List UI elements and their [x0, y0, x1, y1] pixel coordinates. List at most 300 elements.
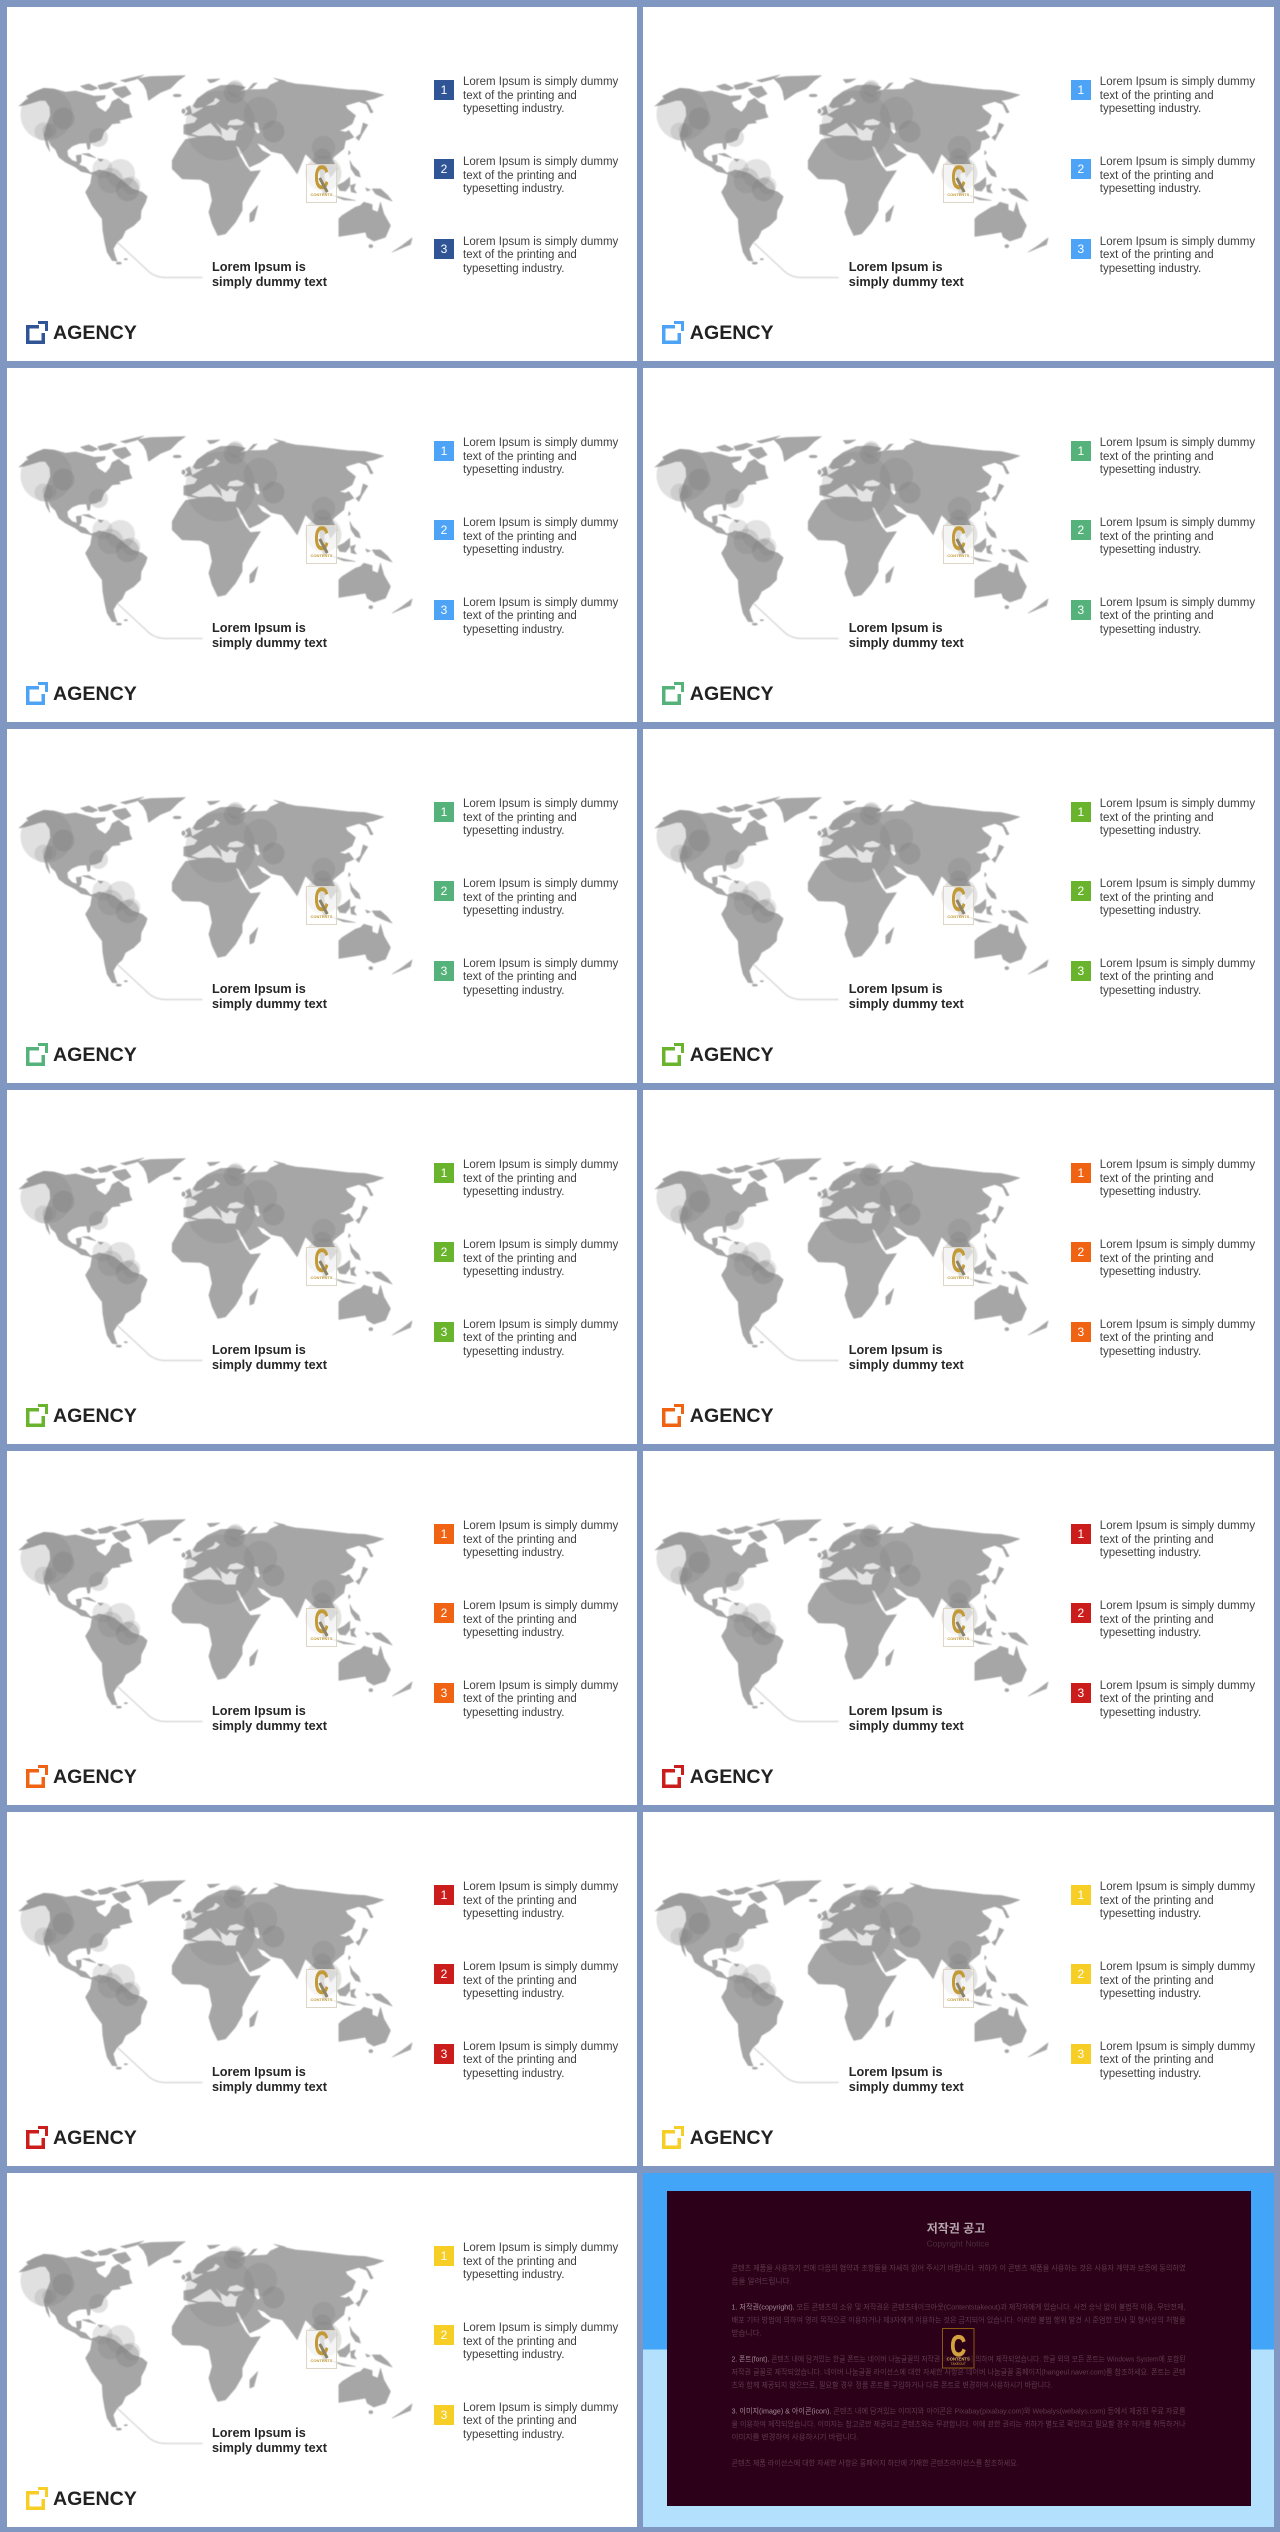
list item 1: typesetting industry. — [463, 1908, 564, 1920]
panel: slide 7 lime — [6, 1090, 637, 1444]
list item 2: Lorem Ipsum is simply dummy — [463, 1600, 618, 1612]
watermark logo — [306, 1608, 337, 1647]
list item 1: typesetting industry. — [463, 1547, 564, 1559]
list item 1 — [434, 437, 618, 476]
watermark logo: CONTENTS — [310, 2358, 332, 2363]
list item 3: 3 — [441, 242, 447, 256]
watermark logo — [943, 164, 974, 203]
list item 3: typesetting industry. — [1100, 624, 1201, 636]
list item 1: text of the printing and — [1100, 90, 1214, 102]
list item 2: Lorem Ipsum is simply dummy — [1100, 156, 1255, 168]
list item 3 — [434, 596, 618, 636]
list item 1: 1 — [441, 1888, 447, 1902]
list item 2: Lorem Ipsum is simply dummy — [463, 2322, 618, 2334]
list item 2: 2 — [441, 1606, 447, 1620]
list item 3: Lorem Ipsum is simply dummy — [463, 1680, 618, 1692]
list item 2: 2 — [441, 2328, 447, 2342]
list item 1: typesetting industry. — [1100, 464, 1201, 476]
list item 3: text of the printing and — [463, 249, 577, 261]
list item 3: text of the printing and — [1100, 2054, 1214, 2066]
list item 2 — [1071, 156, 1256, 195]
list item 1: 1 — [441, 82, 447, 96]
callout: Lorem Ipsum is — [849, 982, 943, 996]
list item 2: Lorem Ipsum is simply dummy — [463, 1239, 618, 1251]
watermark logo — [306, 1247, 337, 1286]
world map — [18, 796, 413, 1000]
list item 3: text of the printing and — [463, 2054, 577, 2066]
world map — [18, 74, 413, 278]
panel: slide 5 green — [6, 728, 637, 1082]
list item 3: typesetting industry. — [463, 1707, 564, 1719]
list item 2: 2 — [441, 1967, 447, 1981]
callout: Lorem Ipsum is — [212, 2426, 306, 2440]
callout: Lorem Ipsum is — [849, 1342, 943, 1356]
list item 3: Lorem Ipsum is simply dummy — [1100, 1680, 1255, 1692]
heading: 저작권 공고 — [927, 2220, 985, 2236]
list item 1: Lorem Ipsum is simply dummy — [1100, 1520, 1255, 1532]
list item 1: typesetting industry. — [1100, 1186, 1201, 1198]
list item 2 — [1071, 1964, 1261, 2008]
list item 1: text of the printing and — [1100, 1895, 1214, 1907]
subheading: Copyright Notice — [927, 2238, 990, 2248]
list item 1: text of the printing and — [1100, 1173, 1214, 1185]
world map — [18, 435, 413, 640]
list item 3: text of the printing and — [463, 2415, 577, 2427]
watermark logo — [943, 1608, 974, 1647]
list item 3 — [1071, 1683, 1261, 1727]
callout: simply dummy text — [212, 636, 327, 650]
list item 1: text of the printing and — [463, 1895, 577, 1907]
list item 2: text of the printing and — [1100, 530, 1214, 542]
watermark logo — [943, 1969, 974, 2008]
list item 2 — [434, 156, 618, 195]
list item 1: 1 — [441, 804, 447, 818]
list item 2: text of the printing and — [463, 1974, 577, 1986]
list item 2: Lorem Ipsum is simply dummy — [1100, 517, 1255, 529]
list item 3: Lorem Ipsum is simply dummy — [463, 2040, 618, 2052]
list item 1: text of the printing and — [463, 1173, 577, 1185]
list item 2: typesetting industry. — [1100, 1266, 1201, 1278]
callout: simply dummy text — [212, 2080, 327, 2094]
list item 1: typesetting industry. — [1100, 825, 1201, 837]
logo: AGENCY — [53, 2488, 137, 2510]
panel: slide 13 yellow — [6, 2172, 637, 2526]
list item 1: Lorem Ipsum is simply dummy — [1100, 76, 1255, 88]
logo: AGENCY — [53, 1404, 137, 1426]
world map — [18, 1157, 413, 1362]
gold contents logo: C — [950, 2328, 966, 2363]
list item 2: typesetting industry. — [1100, 1988, 1201, 2000]
list item 2: Lorem Ipsum is simply dummy — [1100, 1239, 1255, 1251]
list item 3: Lorem Ipsum is simply dummy — [463, 596, 618, 608]
list item 1: text of the printing and — [1100, 812, 1214, 824]
list item 3 — [434, 2405, 624, 2449]
list item 3: Lorem Ipsum is simply dummy — [1100, 958, 1255, 970]
list item 2: text of the printing and — [463, 1614, 577, 1626]
logo: AGENCY — [690, 1404, 774, 1426]
list item 1: text of the printing and — [1100, 451, 1214, 463]
list item 3: text of the printing and — [463, 1693, 577, 1705]
list item 3: 3 — [441, 1325, 447, 1339]
list item 2: text of the printing and — [1100, 1252, 1214, 1264]
list item 3: text of the printing and — [463, 971, 577, 983]
callout — [849, 982, 964, 1010]
list item 2: text of the printing and — [1100, 892, 1214, 904]
logo — [26, 1404, 140, 1428]
callout — [212, 982, 327, 1010]
list item 3 — [434, 958, 618, 997]
logo — [26, 2486, 140, 2510]
list item 3: 3 — [1077, 2047, 1084, 2061]
list item 3: 3 — [441, 2408, 447, 2422]
list item 2: text of the printing and — [463, 170, 577, 182]
callout — [212, 1342, 327, 1372]
list item 1: text of the printing and — [463, 90, 577, 102]
list item 3: typesetting industry. — [463, 985, 564, 997]
list item 3 — [434, 1683, 624, 1727]
watermark logo — [306, 525, 337, 564]
list item 3: 3 — [441, 2047, 447, 2061]
logo: AGENCY — [53, 322, 137, 344]
world map — [6, 1450, 637, 1804]
list item 3: Lorem Ipsum is simply dummy — [463, 1318, 618, 1330]
list item 1: 1 — [1077, 82, 1084, 96]
callout — [212, 1704, 327, 1734]
watermark logo: CONTENTS — [310, 192, 332, 197]
list item 3: text of the printing and — [1100, 1332, 1214, 1344]
list item 2: typesetting industry. — [1100, 1627, 1201, 1639]
callout: Lorem Ipsum is — [212, 1704, 306, 1718]
list item 1 — [434, 1524, 624, 1568]
list item 1: 1 — [441, 1526, 447, 1540]
world map — [6, 1812, 637, 2166]
callout: Lorem Ipsum is — [849, 2064, 943, 2078]
panel: slide 6 lime — [643, 728, 1274, 1082]
list item 2: 2 — [1077, 162, 1084, 176]
list item 1: Lorem Ipsum is simply dummy — [463, 798, 618, 810]
logo — [662, 1764, 777, 1788]
list item 2 — [434, 1239, 618, 1278]
list item 2: 2 — [1077, 523, 1084, 537]
list item 1: typesetting industry. — [463, 825, 564, 837]
callout: simply dummy text — [212, 1358, 327, 1372]
list item 1: text of the printing and — [1100, 1534, 1214, 1546]
list item 2: Lorem Ipsum is simply dummy — [1100, 1961, 1255, 1973]
list item 1: 1 — [1077, 1526, 1084, 1540]
list item 3: 3 — [1077, 1325, 1084, 1339]
watermark logo: CONTENTS — [310, 1636, 332, 1641]
watermark logo: CONTENTS — [947, 1275, 969, 1280]
callout: Lorem Ipsum is — [849, 1704, 943, 1718]
list item 2: text of the printing and — [463, 892, 577, 904]
list item 2 — [1071, 517, 1256, 556]
list item 1: typesetting industry. — [1100, 103, 1201, 115]
list item 3: typesetting industry. — [1100, 1346, 1201, 1358]
list item 2: 2 — [1077, 1245, 1084, 1259]
notice body: 콘텐츠 제품 라이선스에 대한 자세한 사항은 홈페이지 하단에 기재한 콘텐츠라이선스를 참조하세요. — [731, 2458, 1018, 2468]
list item 2: typesetting industry. — [1100, 544, 1201, 556]
list item 3 — [1071, 2044, 1261, 2088]
logo: AGENCY — [53, 2126, 137, 2148]
list item 2 — [1071, 1603, 1261, 1647]
world map — [654, 74, 1049, 278]
logo: AGENCY — [690, 1766, 774, 1788]
logo: AGENCY — [690, 2126, 774, 2148]
list item 1: Lorem Ipsum is simply dummy — [463, 2242, 618, 2254]
list item 3 — [1071, 958, 1256, 997]
list item 2: 2 — [441, 523, 447, 537]
callout: simply dummy text — [849, 1358, 964, 1372]
list item 3: typesetting industry. — [463, 2068, 564, 2080]
list item 1: Lorem Ipsum is simply dummy — [463, 1159, 618, 1171]
list item 3: 3 — [441, 1686, 447, 1700]
logo — [26, 2126, 140, 2150]
logo: AGENCY — [53, 1766, 137, 1788]
notice body: 저작권 글꼴로 제작되었습니다. 네이버 나눔글꼴 라이선스에 대한 자세한 사항은 네이버 나눔글꼴 홈페이지(hangeul.naver.com)를 참조하세요. 폰트는 콘텐 — [731, 2366, 1185, 2376]
list item 1: 1 — [1077, 804, 1084, 818]
list item 3: typesetting industry. — [463, 1346, 564, 1358]
list item 3: 3 — [441, 603, 447, 617]
list item 2 — [434, 517, 618, 556]
list item 1 — [434, 76, 618, 115]
watermark logo: CONTENTS — [310, 553, 332, 558]
list item 3: text of the printing and — [1100, 610, 1214, 622]
panel: slide 1 navy — [6, 6, 637, 360]
list item 3: typesetting industry. — [463, 263, 564, 275]
callout: simply dummy text — [849, 996, 964, 1010]
watermark logo — [943, 886, 974, 925]
notice body: 츠와 함께 제공되지 않으므로, 필요할 경우 정품 폰트를 구입하거나 다른 폰트로 변경하여 사용하시기 바랍니다. — [731, 2380, 1052, 2390]
watermark logo: CONTENTS — [947, 1997, 969, 2002]
panel: slide 2 blue — [643, 6, 1274, 360]
watermark logo: CONTENTS — [310, 1997, 332, 2002]
list item 1 — [434, 798, 618, 837]
list item 3 — [434, 1322, 624, 1366]
logo: AGENCY — [690, 1044, 774, 1066]
list item 1: text of the printing and — [463, 812, 577, 824]
list item 3 — [1071, 596, 1256, 636]
list item 1 — [1071, 437, 1256, 476]
logo: AGENCY — [53, 682, 137, 704]
logo: AGENCY — [53, 1044, 137, 1066]
panel: copyright notice — [643, 2172, 1274, 2526]
list item 1: typesetting industry. — [1100, 1547, 1201, 1559]
list item 2 — [434, 1964, 624, 2008]
watermark logo: CONTENTS — [947, 192, 969, 197]
list item 3 — [1071, 1322, 1261, 1366]
list item 3: 3 — [1077, 603, 1084, 617]
list item 3: Lorem Ipsum is simply dummy — [1100, 2040, 1255, 2052]
list item 1 — [1071, 76, 1256, 115]
list item 1 — [1071, 1884, 1261, 1928]
list item 1: Lorem Ipsum is simply dummy — [1100, 1159, 1255, 1171]
list item 2: text of the printing and — [463, 1252, 577, 1264]
list item 1 — [434, 2246, 624, 2290]
list item 2: typesetting industry. — [463, 905, 564, 917]
list item 3 — [434, 236, 618, 275]
list item 1: 1 — [1077, 444, 1084, 458]
world map — [643, 1450, 1274, 1804]
callout: Lorem Ipsum is — [212, 2064, 306, 2078]
list item 1 — [434, 1159, 618, 1198]
list item 3: typesetting industry. — [1100, 2068, 1201, 2080]
list item 3: typesetting industry. — [463, 2429, 564, 2441]
list item 3: text of the printing and — [1100, 971, 1214, 983]
gold contents logo — [942, 2328, 974, 2368]
list item 2 — [1071, 1242, 1261, 1286]
list item 3: Lorem Ipsum is simply dummy — [1100, 596, 1255, 608]
callout — [849, 1704, 964, 1734]
list item 1: Lorem Ipsum is simply dummy — [463, 1881, 618, 1893]
panel: slide 9 orange — [6, 1450, 637, 1804]
callout: simply dummy text — [212, 1718, 327, 1732]
logo — [26, 1764, 140, 1788]
callout — [849, 2064, 964, 2094]
list item 1: text of the printing and — [463, 2256, 577, 2268]
list item 1: text of the printing and — [463, 1534, 577, 1546]
notice body: 배포 기타 방법에 의하여 영리 목적으로 이용하거나 제3자에게 이용하는 것은 금지되어 있습니다. 이러한 불법 행위 발견 시 준엄한 민사 및 형사상의 처벌을 — [731, 2314, 1185, 2324]
watermark logo — [306, 886, 337, 925]
list item 2: text of the printing and — [1100, 1974, 1214, 1986]
callout: Lorem Ipsum is — [212, 620, 306, 634]
watermark logo — [306, 2330, 337, 2369]
list item 2: typesetting industry. — [463, 1627, 564, 1639]
list item 1: Lorem Ipsum is simply dummy — [463, 76, 618, 88]
watermark logo: CONTENTS — [947, 914, 969, 919]
list item 2: typesetting industry. — [1100, 905, 1201, 917]
callout — [212, 260, 327, 288]
list item 3: typesetting industry. — [463, 624, 564, 636]
list item 3: 3 — [441, 964, 447, 978]
list item 1: Lorem Ipsum is simply dummy — [463, 1520, 618, 1532]
list item 3: typesetting industry. — [1100, 263, 1201, 275]
watermark logo: CONTENTS — [947, 1636, 969, 1641]
world map — [643, 1090, 1274, 1444]
list item 1: typesetting industry. — [1100, 1908, 1201, 1920]
world map — [6, 2172, 637, 2526]
list item 1: 1 — [1077, 1166, 1084, 1180]
list item 2: text of the printing and — [463, 2336, 577, 2348]
callout: Lorem Ipsum is — [212, 1342, 306, 1356]
callout: simply dummy text — [212, 2440, 327, 2454]
notice body — [731, 2262, 1185, 2468]
list item 1: typesetting industry. — [463, 2269, 564, 2281]
world map — [654, 796, 1049, 1000]
list item 2: typesetting industry. — [463, 1266, 564, 1278]
gold contents logo: CONTENTS — [947, 2356, 970, 2362]
list item 1: typesetting industry. — [463, 103, 564, 115]
panel: slide 11 red — [6, 1812, 637, 2166]
copyright text box — [667, 2191, 1251, 2506]
panel: slide 4 green — [643, 368, 1274, 722]
list item 3: text of the printing and — [463, 1332, 577, 1344]
callout: simply dummy text — [212, 996, 327, 1010]
list item 2: 2 — [441, 1245, 447, 1259]
callout: Lorem Ipsum is — [849, 260, 943, 274]
list item 2: 2 — [441, 162, 447, 176]
list item 2: 2 — [1077, 1967, 1084, 1981]
callout — [212, 2064, 327, 2094]
list item 3: 3 — [1077, 242, 1084, 256]
panel: slide 3 blue — [6, 368, 637, 722]
list item 3: text of the printing and — [463, 610, 577, 622]
logo: AGENCY — [690, 322, 774, 344]
list item 1 — [1071, 1162, 1261, 1206]
world map — [643, 1812, 1274, 2166]
list item 1: Lorem Ipsum is simply dummy — [463, 437, 618, 449]
list item 2: typesetting industry. — [1100, 183, 1201, 195]
callout — [849, 260, 964, 288]
list item 2: 2 — [1077, 1606, 1084, 1620]
list item 3: 3 — [1077, 1686, 1084, 1700]
callout — [212, 2426, 327, 2456]
callout: simply dummy text — [849, 1718, 964, 1732]
list item 2: typesetting industry. — [463, 1988, 564, 2000]
notice body: 1. 저작권(copyright). 모든 콘텐츠의 소유 및 저작권은 콘텐츠테이크아웃(Contentstakeout)과 제작자에게 있습니다. 사전 승낙 없이 불법적 이용, 무단전재, — [731, 2302, 1185, 2312]
watermark logo — [306, 164, 337, 203]
callout: Lorem Ipsum is — [212, 982, 306, 996]
panel: slide 8 orange — [643, 1090, 1274, 1444]
callout — [212, 620, 327, 650]
list item 1 — [434, 1884, 624, 1928]
list item 1: typesetting industry. — [463, 464, 564, 476]
list item 1 — [1071, 1524, 1261, 1568]
list item 2 — [434, 1603, 624, 1647]
list item 1: typesetting industry. — [463, 1186, 564, 1198]
list item 1: text of the printing and — [463, 451, 577, 463]
logo — [662, 2126, 777, 2150]
list item 3: Lorem Ipsum is simply dummy — [1100, 236, 1255, 248]
watermark logo: CONTENTS — [310, 914, 332, 919]
notice body: 2. 폰트(font). 콘텐츠 내에 담겨있는 한글 폰트는 네이버 나눔글꼴의 저작권 라이선스에 의하여 제작되었습니다. 한글 외의 모든 폰트는 Windows System에 포함된 — [731, 2354, 1185, 2364]
callout: simply dummy text — [849, 2080, 964, 2094]
list item 2: Lorem Ipsum is simply dummy — [463, 517, 618, 529]
callout: simply dummy text — [849, 274, 964, 288]
list item 1: 1 — [441, 2248, 447, 2262]
callout: Lorem Ipsum is — [212, 260, 306, 274]
list item 1: 1 — [1077, 1888, 1084, 1902]
list item 1: Lorem Ipsum is simply dummy — [1100, 1881, 1255, 1893]
list item 2: 2 — [1077, 884, 1084, 898]
callout: simply dummy text — [212, 274, 327, 288]
list item 3: typesetting industry. — [1100, 985, 1201, 997]
notice body: 3. 이미지(image) & 아이콘(icon). 콘텐츠 내에 담겨있는 이미지와 아이콘은 Pixabay(pixabay.com)와 Webalys(webalys.com) 등에서 제공된 무료 자료를 — [731, 2406, 1185, 2416]
notice body: 을 이용하여 제작되었습니다. 이미지는 참고로만 제공되고 콘텐츠와는 무관합니다. 이에 관한 권리는 귀하가 별도로 확인하고 필요할 경우 허가를 취득하거나 — [731, 2418, 1185, 2428]
callout: simply dummy text — [849, 636, 964, 650]
watermark logo — [306, 1969, 337, 2008]
list item 2: 2 — [441, 884, 447, 898]
list item 3: typesetting industry. — [1100, 1707, 1201, 1719]
list item 2: text of the printing and — [1100, 170, 1214, 182]
list item 3: 3 — [1077, 964, 1084, 978]
list item 2: typesetting industry. — [463, 2349, 564, 2361]
list item 2 — [1071, 878, 1256, 917]
list item 2: Lorem Ipsum is simply dummy — [1100, 1600, 1255, 1612]
list item 3: Lorem Ipsum is simply dummy — [1100, 1318, 1255, 1330]
watermark logo: CONTENTS — [310, 1275, 332, 1280]
list item 2: text of the printing and — [463, 530, 577, 542]
notice body: 받습니다. — [731, 2328, 762, 2338]
notice body: 음을 알려드립니다. — [731, 2276, 792, 2286]
notice body: 이미지를 변경하여 사용하시기 바랍니다. — [731, 2432, 859, 2442]
watermark logo — [943, 525, 974, 564]
watermark logo: CONTENTS — [947, 553, 969, 558]
list item 1 — [1071, 798, 1256, 837]
list item 2: typesetting industry. — [463, 544, 564, 556]
list item 2: Lorem Ipsum is simply dummy — [463, 1961, 618, 1973]
list item 2: text of the printing and — [1100, 1614, 1214, 1626]
list item 2: Lorem Ipsum is simply dummy — [463, 878, 618, 890]
